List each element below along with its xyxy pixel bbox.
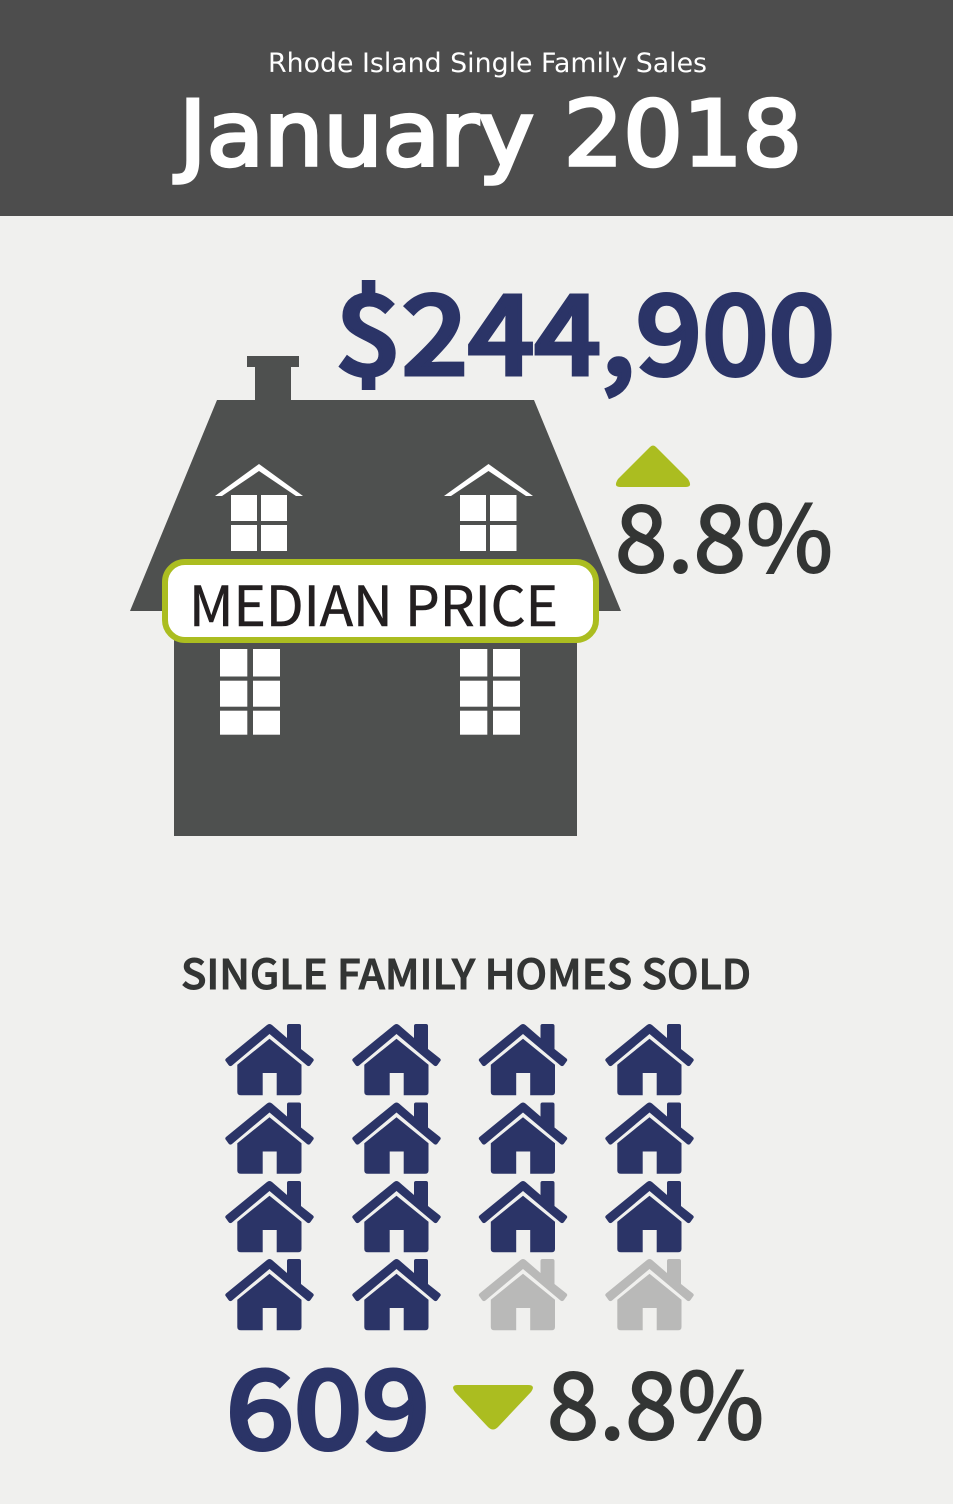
homes sold heading: SINGLE FAMILY HOMES SOLD [181, 941, 751, 1001]
lower window left [220, 649, 280, 735]
dormer left [215, 464, 303, 551]
header banner [0, 0, 953, 216]
subtitle: Rhode Island Single Family Sales [268, 48, 707, 79]
homes sold change: 8.8% [547, 1333, 764, 1466]
median price value: $244,900 [335, 246, 835, 406]
dormer right [444, 464, 533, 551]
icon grid: homes sold [225, 1024, 694, 1330]
lower window right [460, 649, 520, 735]
icon: large house [130, 356, 621, 836]
arrow up [616, 446, 690, 487]
homes sold value: 609 [226, 1324, 430, 1480]
arrow down [453, 1385, 533, 1430]
median price label: MEDIAN PRICE [189, 562, 558, 642]
title: January 2018 [174, 82, 802, 187]
median price change: 8.8% [615, 466, 833, 599]
